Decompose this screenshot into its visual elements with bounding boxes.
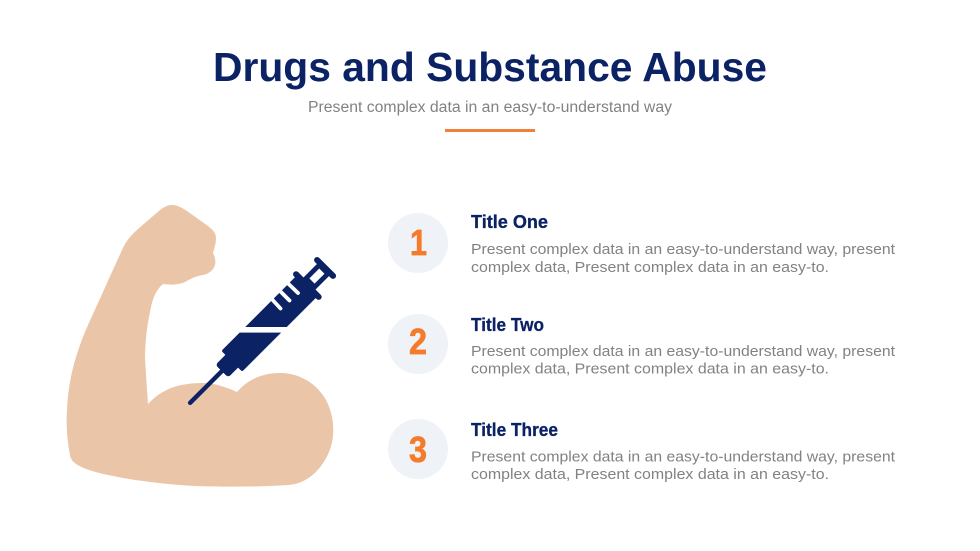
body text 2: complex data, Present complex data in an easy-to.: [471, 360, 829, 378]
heading: Title Three: Title Three: [471, 419, 558, 440]
number badge 2: 2: [409, 321, 427, 362]
title: Drugs and Substance Abuse: [213, 44, 767, 90]
body text 3: complex data, Present complex data in an easy-to.: [471, 466, 829, 483]
item 2: [388, 314, 896, 378]
body text 1: complex data, Present complex data in an easy-to.: [471, 259, 829, 276]
heading: Title Two: Title Two: [471, 314, 544, 335]
icon: syringe: [175, 252, 341, 418]
icon: flexed arm: [67, 205, 333, 487]
title underline: [445, 129, 535, 132]
number badge 2: [388, 314, 448, 374]
body text 1: Present complex data in an easy-to-understand way, present: [471, 241, 896, 258]
subtitle: Present complex data in an easy-to-understand way: [308, 99, 672, 116]
body text 2: Present complex data in an easy-to-understand way, present: [471, 343, 896, 360]
body text 3: Present complex data in an easy-to-understand way, present: [471, 448, 896, 466]
number badge 1: 1: [410, 222, 427, 263]
item 3: [388, 419, 896, 483]
number badge 1: [388, 213, 448, 273]
heading: Title One: Title One: [471, 211, 548, 232]
number badge 3: 3: [409, 429, 427, 470]
number badge 3: [388, 419, 448, 479]
item 1: [388, 211, 896, 276]
